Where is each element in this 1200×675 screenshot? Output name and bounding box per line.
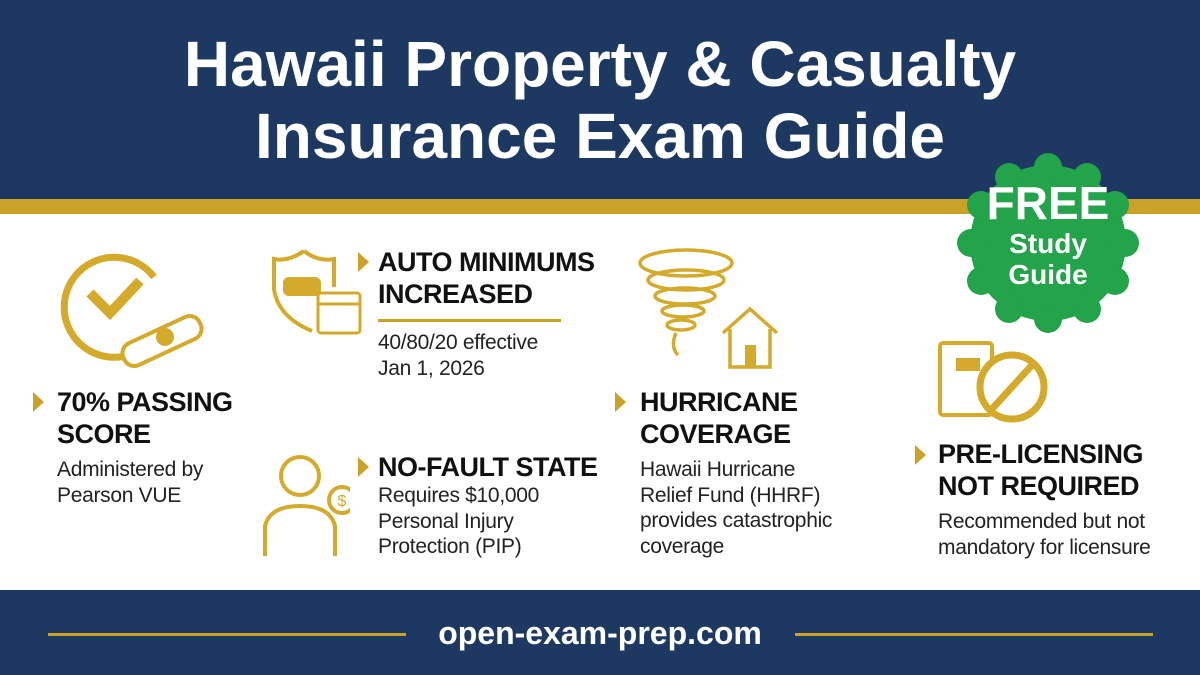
header banner — [0, 0, 1200, 199]
title — [184, 28, 1016, 172]
description: 40/80/20 effective — [378, 331, 538, 354]
description — [938, 510, 1151, 558]
heading: INCREASED — [378, 279, 533, 309]
footer url: open-exam-prep.com — [438, 615, 762, 651]
description: provides catastrophic — [640, 509, 832, 532]
heading — [57, 387, 233, 449]
description: Requires $10,000 — [378, 484, 539, 507]
description: Administered by — [57, 458, 203, 481]
gold stripe — [0, 199, 1200, 214]
icon: tornado and house — [638, 248, 778, 369]
title: Hawaii Property & Casualty — [184, 28, 1016, 100]
description — [640, 458, 832, 558]
description: Hawaii Hurricane — [640, 458, 795, 481]
badge: free study guide: Study — [1009, 228, 1087, 259]
panel: pre-licensing — [915, 341, 1151, 558]
description: Pearson VUE — [57, 484, 181, 506]
heading: SCORE — [57, 419, 151, 449]
heading: 70% PASSING — [57, 387, 233, 417]
icon: check and diploma — [60, 254, 204, 368]
badge: free study guide: FREE — [987, 177, 1109, 229]
footer — [0, 590, 1200, 675]
description: mandatory for licensure — [938, 536, 1151, 558]
badge: free study guide — [957, 153, 1139, 333]
heading — [938, 439, 1143, 501]
panel: passing score — [33, 254, 233, 506]
panel: auto minimums — [272, 247, 594, 380]
icon: book with prohibition sign — [938, 341, 1048, 422]
description: Personal Injury — [378, 510, 514, 532]
heading: COVERAGE — [640, 419, 791, 449]
description: Jan 1, 2026 — [378, 356, 484, 380]
description: Recommended but not — [938, 510, 1145, 533]
heading: AUTO MINIMUMS — [378, 247, 594, 277]
description: Relief Fund (HHRF) — [640, 484, 820, 506]
heading: NOT REQUIRED — [938, 471, 1139, 501]
icon: shield car calendar — [272, 249, 362, 334]
badge: free study guide: Guide — [1008, 259, 1088, 290]
heading: NO-FAULT STATE — [378, 452, 597, 482]
icon: injured person: $ — [338, 493, 347, 510]
panel: no-fault — [263, 452, 597, 558]
icon: injured person — [263, 455, 350, 556]
description: coverage — [640, 534, 724, 558]
heading — [640, 387, 798, 449]
description — [378, 331, 538, 380]
heading — [378, 247, 594, 309]
description — [378, 484, 539, 558]
heading: PRE-LICENSING — [938, 439, 1143, 469]
heading: HURRICANE — [640, 387, 798, 417]
description — [57, 458, 204, 506]
panel: hurricane — [615, 248, 832, 558]
title: Insurance Exam Guide — [255, 100, 945, 172]
description: Protection (PIP) — [378, 535, 521, 558]
